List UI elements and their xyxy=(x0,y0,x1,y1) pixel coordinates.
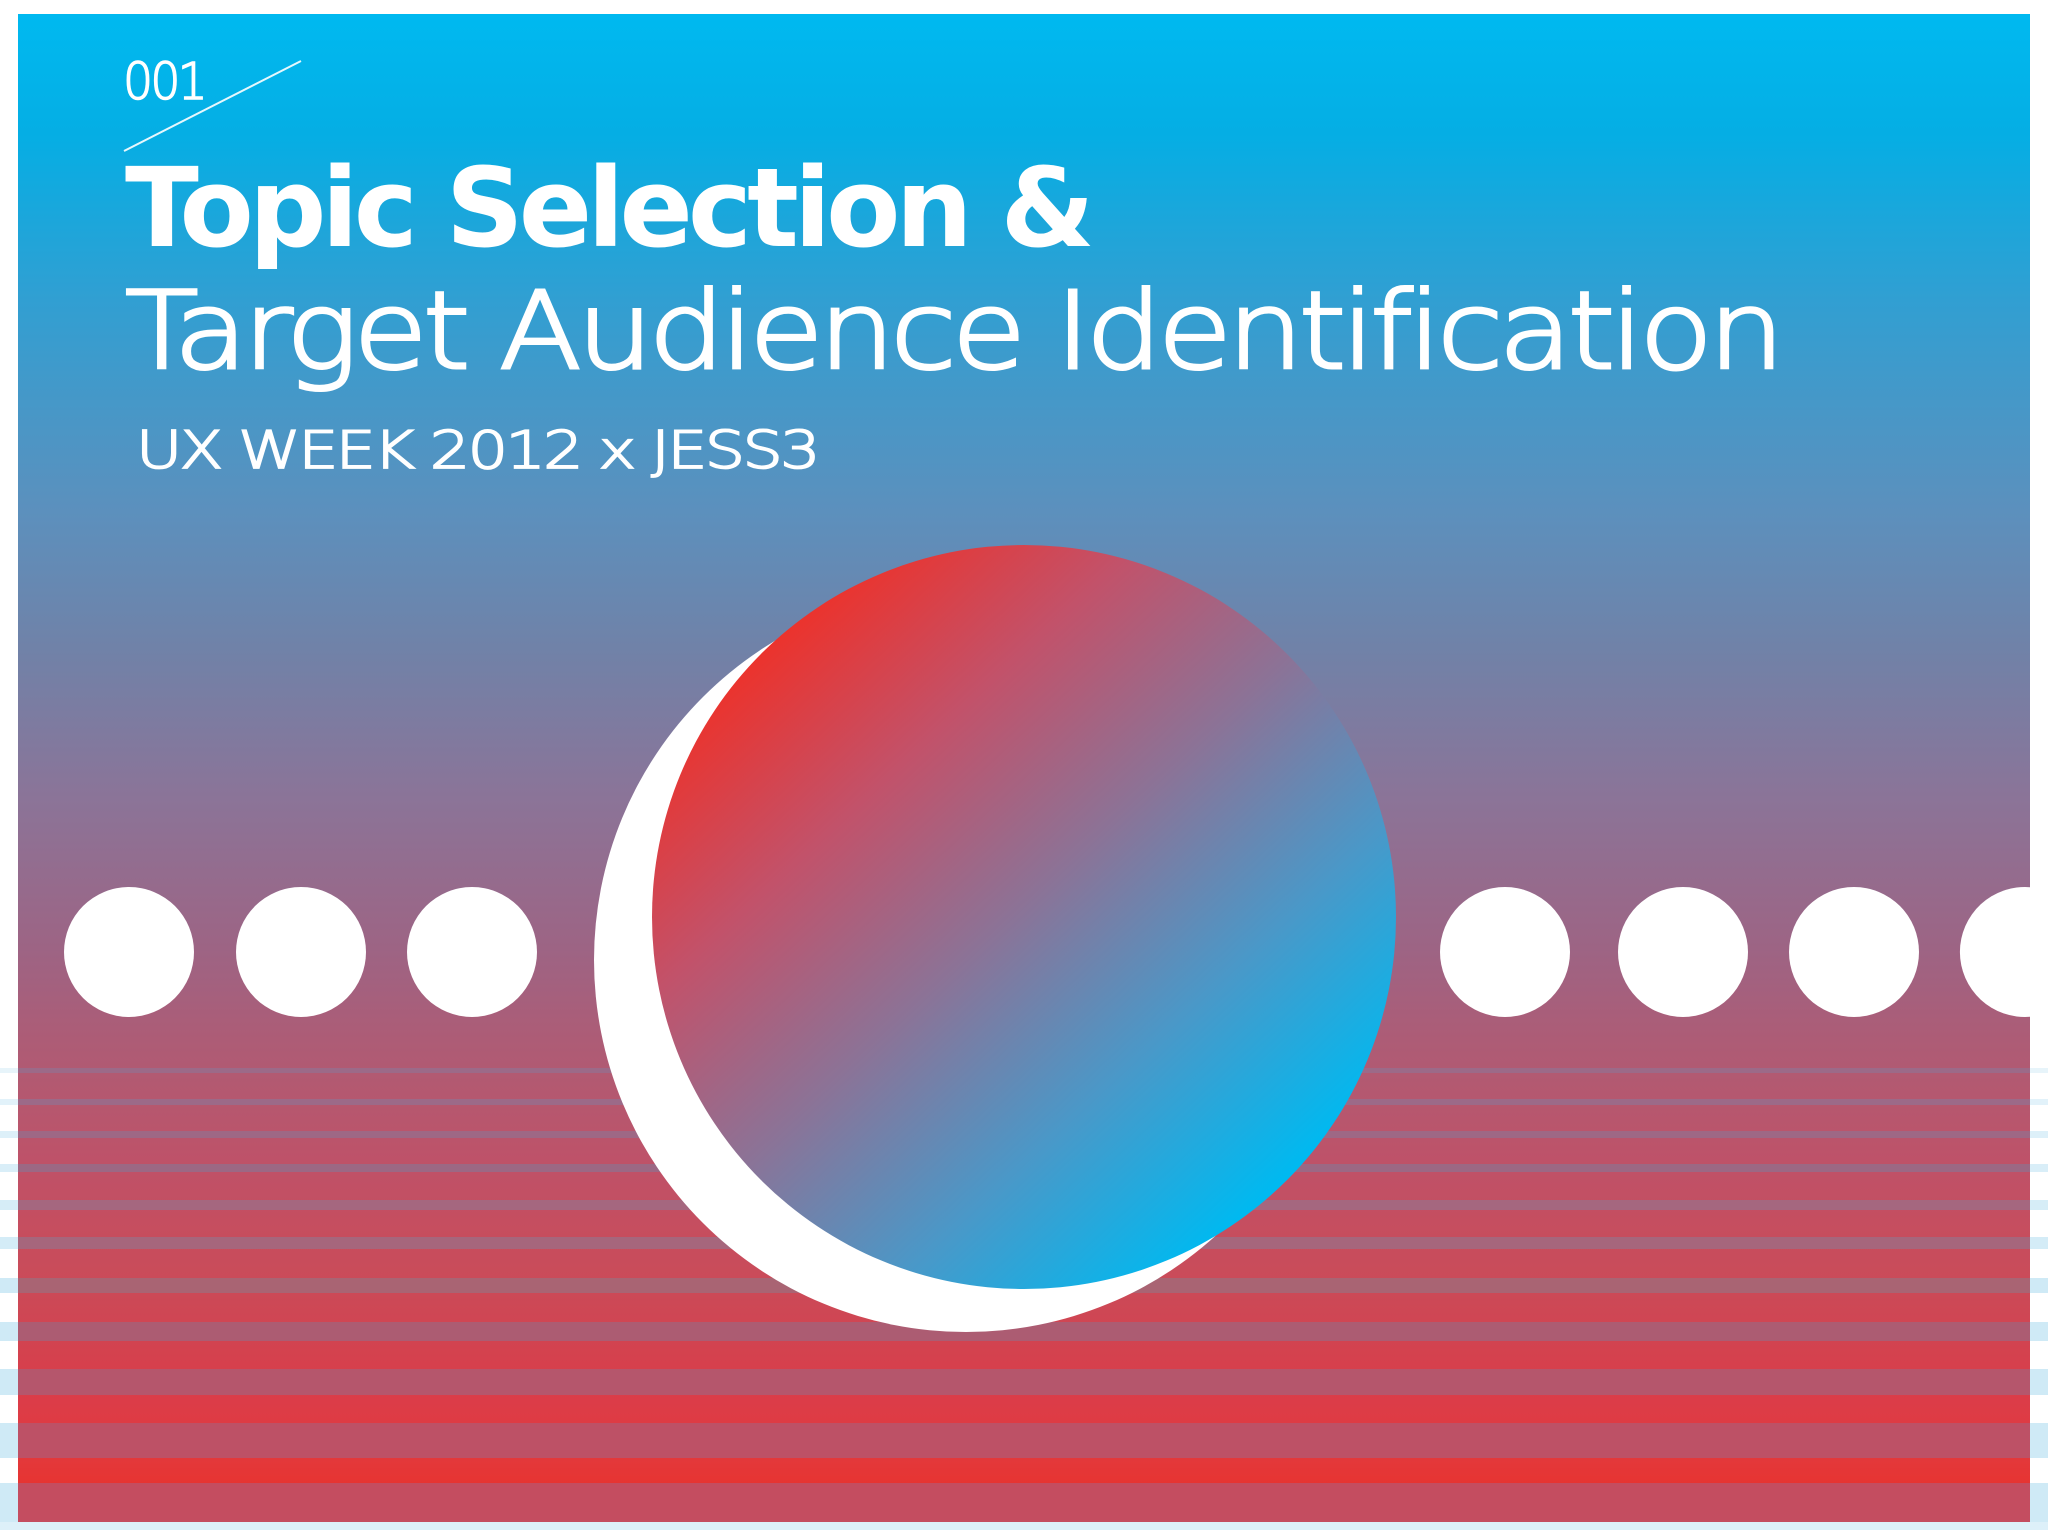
issue number: 001 xyxy=(123,53,205,112)
row of white dots, right xyxy=(1440,887,2030,1017)
horizontal stripes xyxy=(18,1068,2030,1522)
title line 1: Topic Selection & xyxy=(125,144,1091,272)
gradient orb xyxy=(652,545,1396,1289)
row of white dots, left xyxy=(64,887,537,1017)
subtitle: UX WEEK 2012 x JESS3 xyxy=(136,421,818,481)
margin stripes: pale blue bands outside the panel xyxy=(0,1068,2048,1530)
white crescent circle xyxy=(594,588,1338,1332)
title line 2: Target Audience Identification xyxy=(125,270,1780,394)
diagonal slash xyxy=(124,61,301,151)
